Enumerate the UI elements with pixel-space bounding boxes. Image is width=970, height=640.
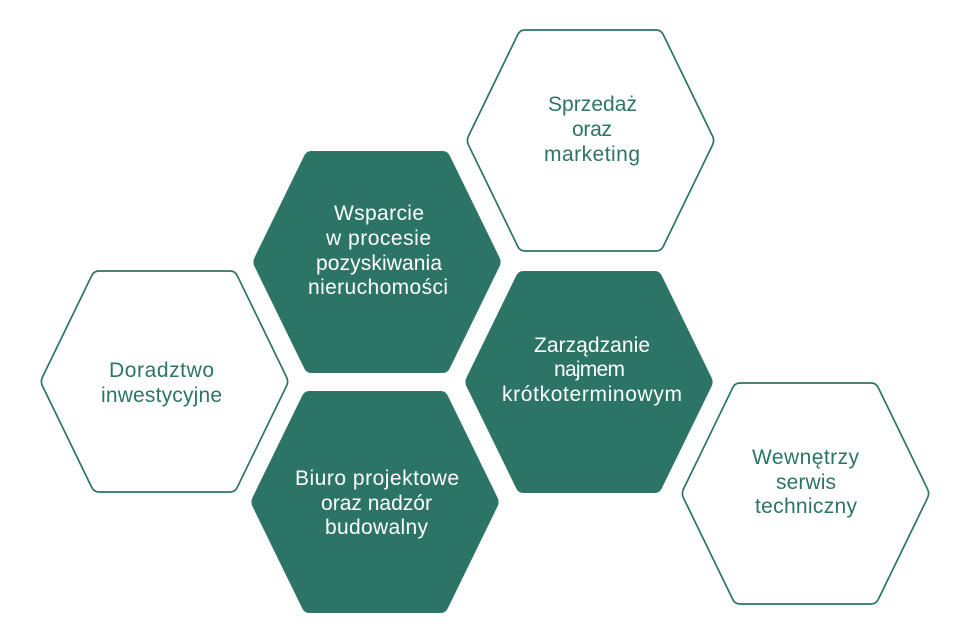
hexagon: Sprzedaż oraz marketing: oraz <box>572 118 612 141</box>
hexagon: Zarządzanie najmem krótkoterminowym <box>465 271 713 493</box>
hexagon: Wsparcie w procesie pozyskiwania nieruchomości: nieruchomości <box>308 276 448 299</box>
hexagon: Zarządzanie najmem krótkoterminowym: Zarządzanie <box>534 334 650 357</box>
hexagon: Wsparcie w procesie pozyskiwania nieruchomości: Wsparcie <box>334 202 424 225</box>
hexagon: Biuro projektowe oraz nadzór budowalny: budowalny <box>325 516 428 539</box>
hexagon: Wewnętrzy serwis techniczny: techniczny <box>755 495 858 518</box>
hexagon: Zarządzanie najmem krótkoterminowym: krótkoterminowym <box>502 383 682 406</box>
hexagon: Sprzedaż oraz marketing <box>467 30 714 251</box>
hexagon: Wewnętrzy serwis techniczny: serwis <box>776 471 836 494</box>
hexagon: Wsparcie w procesie pozyskiwania nieruchomości: pozyskiwania <box>316 252 442 275</box>
hexagon: Zarządzanie najmem krótkoterminowym: najmem <box>554 358 625 381</box>
hexagon: Wewnętrzy serwis techniczny <box>682 383 929 604</box>
hexagon: Sprzedaż oraz marketing: marketing <box>544 143 640 166</box>
hexagon: Doradztwo inwestycyjne: Doradztwo <box>109 359 214 382</box>
hexagon: Biuro projektowe oraz nadzór budowalny <box>251 391 499 613</box>
hexagon: Biuro projektowe oraz nadzór budowalny: Biuro projektowe <box>295 467 459 490</box>
hexagon: Wewnętrzy serwis techniczny: Wewnętrzy <box>752 446 860 469</box>
hexagon: Sprzedaż oraz marketing: Sprzedaż <box>548 93 637 116</box>
hexagon: Doradztwo inwestycyjne <box>41 271 288 492</box>
hexagon: Wsparcie w procesie pozyskiwania nieruchomości <box>253 151 501 373</box>
hexagon: Wsparcie w procesie pozyskiwania nieruchomości: w procesie <box>325 227 431 250</box>
hexagon: Doradztwo inwestycyjne: inwestycyjne <box>101 384 222 407</box>
hexagon: Biuro projektowe oraz nadzór budowalny: oraz nadzór <box>321 492 432 515</box>
